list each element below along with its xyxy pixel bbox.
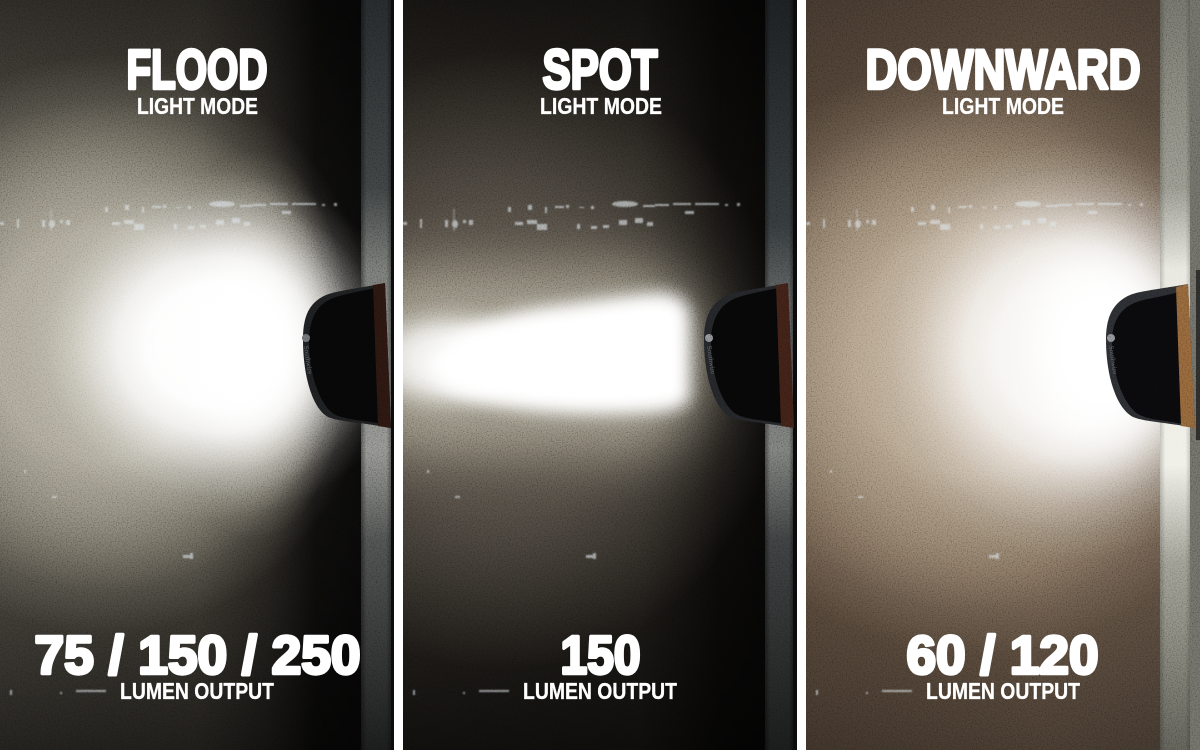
lumen output: spot: 150 (560, 626, 640, 686)
icon: lantern silhouette (spot): Southwire (705, 345, 717, 375)
panel: flood light mode (0, 0, 410, 750)
panel: spot light mode (403, 0, 797, 750)
icon: lantern silhouette (spot) (704, 283, 794, 428)
heading: downward (866, 38, 1140, 119)
icon: lantern silhouette (downward) (1106, 284, 1195, 428)
heading: spot (540, 38, 662, 119)
icon: lantern silhouette (downward): Southwire (1107, 345, 1119, 375)
heading: spot: SPOT (542, 38, 658, 100)
subheading: downward light mode: LIGHT MODE (942, 93, 1064, 119)
subheading: flood light mode: LIGHT MODE (137, 93, 258, 119)
label: downward lumen output: LUMEN OUTPUT (926, 678, 1080, 704)
lumen output: spot (523, 626, 677, 704)
icon: lantern silhouette (flood) (302, 283, 391, 428)
heading: flood: FLOOD (126, 38, 268, 100)
panel: downward light mode (806, 0, 1200, 750)
lumen output: flood: 75 / 150 / 250 (34, 626, 360, 686)
lumen output: downward: 60 / 120 (906, 626, 1098, 686)
icon: lantern silhouette (flood): Southwire (302, 345, 314, 375)
label: spot lumen output: LUMEN OUTPUT (523, 678, 677, 704)
subheading: spot light mode: LIGHT MODE (540, 93, 662, 119)
heading: flood (126, 38, 268, 119)
label: flood lumen output: LUMEN OUTPUT (120, 678, 274, 704)
